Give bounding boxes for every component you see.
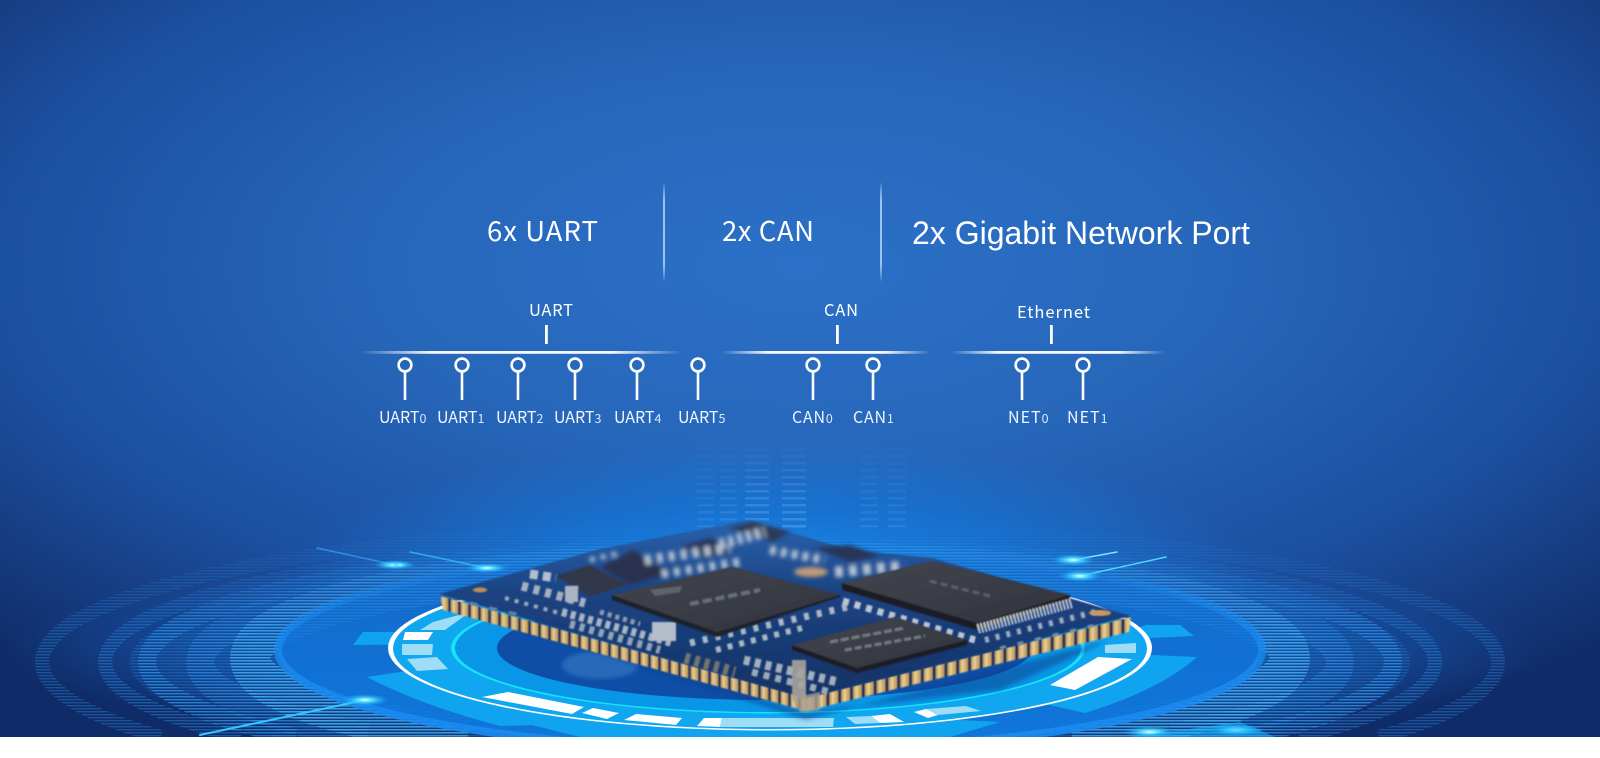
system-on-module board photo <box>439 520 1131 720</box>
outer disc <box>274 566 1266 737</box>
bus line <box>951 325 1165 354</box>
port labels: UART5 <box>678 404 725 428</box>
dark centre ellipse <box>497 621 1032 700</box>
disc light bands <box>353 625 1197 737</box>
data stream columns <box>697 462 906 528</box>
board shadow <box>470 612 1110 720</box>
front passive rows <box>685 601 1100 712</box>
white outer ring <box>388 596 1152 730</box>
heading: 2x CAN: 2x CAN <box>722 209 814 249</box>
back components, out of focus <box>590 522 905 585</box>
label: CAN bus: CAN <box>824 297 858 321</box>
port labels: UART0 <box>379 404 426 428</box>
port labels: CAN1 <box>853 404 895 428</box>
port nodes <box>399 359 704 400</box>
divider between CAN and network <box>880 182 882 282</box>
board top surface <box>439 520 1131 698</box>
port labels: UART1 <box>437 404 484 428</box>
CAN bus diagram <box>721 297 931 428</box>
tech disc platform <box>35 455 1505 737</box>
port labels <box>1008 404 1109 428</box>
bus line <box>721 325 931 354</box>
port labels: UART4 <box>614 404 661 428</box>
label: UART bus: UART <box>529 297 573 321</box>
central glow <box>344 462 1205 590</box>
wide under-glow <box>52 588 1485 734</box>
port labels: UART2 <box>496 404 543 428</box>
heading: 6x UART: 6x UART <box>487 209 598 249</box>
bus line <box>360 325 683 354</box>
gold via near corner <box>1089 610 1111 616</box>
port labels <box>792 404 895 428</box>
port nodes <box>1016 359 1089 400</box>
ring segments <box>403 632 1132 727</box>
left passive components <box>470 565 676 650</box>
port labels: NET1 <box>1067 404 1109 428</box>
divider between UART and CAN <box>663 182 665 282</box>
flash chip <box>792 617 967 673</box>
processor chip <box>612 567 840 637</box>
port nodes <box>807 359 879 400</box>
port labels: UART3 <box>554 404 601 428</box>
cyan inner ring <box>451 612 1085 714</box>
UART bus diagram <box>360 297 725 428</box>
heading: 2x Gigabit Network Port: 2x Gigabit Network Port <box>912 215 1250 251</box>
port labels: NET0 <box>1008 404 1050 428</box>
port labels: CAN0 <box>792 404 834 428</box>
light traces with sparks <box>200 548 1275 738</box>
gold edge pads <box>440 596 1131 711</box>
port labels <box>379 404 725 428</box>
centre texture <box>562 651 638 679</box>
Ethernet bus diagram <box>951 299 1165 428</box>
memory chip with leads <box>842 561 1072 630</box>
label: Ethernet bus: Ethernet <box>1017 299 1090 323</box>
striped outer rings <box>42 525 1498 737</box>
